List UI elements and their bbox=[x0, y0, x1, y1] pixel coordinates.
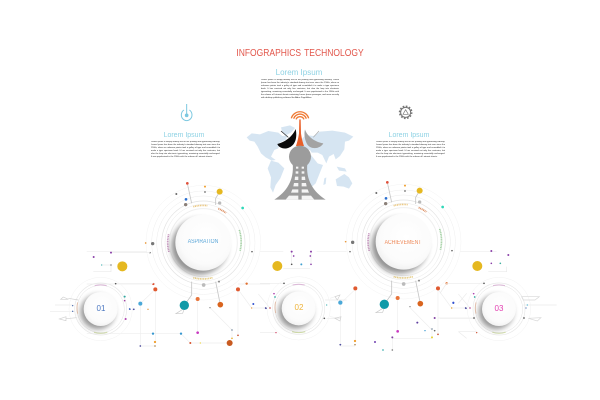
panel: step 03 circle bbox=[440, 250, 557, 341]
panel: achievement large circle bbox=[317, 181, 497, 351]
label: 01: 01 bbox=[97, 304, 105, 313]
network nodes bbox=[72, 252, 134, 320]
text block: top: Lorem Ipsum is simply dummy text of the printing and typesetting industry. Lorem Ipsum has been the industry's standard dummy text ever since the 1500s, when an unknown printer took a galley of type and scrambled it to make a type specimen book. It has survived not only five centuries, but also the leap into electronic typesetting, remaining essentially unchanged. It was popularised in the 1960s with the release of Letraset sheets containing Lorem Ipsum passages, and more recently with desktop publishing software like Aldus PageMaker. bbox=[261, 79, 339, 99]
label: achievement: ACHIEVEMENT bbox=[385, 240, 421, 246]
icon: power bbox=[181, 104, 192, 121]
heading: right lorem ipsum: Lorem Ipsum bbox=[389, 132, 429, 139]
satellite dish grey bbox=[304, 129, 323, 148]
icon: gear bbox=[400, 106, 412, 118]
label: 03: 03 bbox=[495, 304, 503, 313]
heading: left lorem ipsum: Lorem Ipsum bbox=[164, 132, 204, 139]
title: INFOGRAPHICS TECHNOLOGY bbox=[236, 48, 364, 59]
antenna signal arcs bbox=[291, 112, 309, 119]
text block: right: Lorem Ipsum is simply dummy text of the printing and typesetting industry. Lorem Ipsum has been the industry's standard dummy text ever since the 1500s, when an unknown printer took a galley of type and scrambled it to make a type specimen book. It has survived not only five centuries, but also the leap into electronic typesetting, remaining essentially unchanged. It was popularised in the 1960s with the release of Letraset sheets. bbox=[376, 141, 445, 158]
label: 02: 02 bbox=[295, 303, 303, 312]
panel: aspiration large circle bbox=[87, 182, 283, 347]
network nodes bbox=[451, 250, 528, 333]
heading: top lorem ipsum: Lorem Ipsum bbox=[276, 68, 322, 77]
panel: step 01 circle bbox=[50, 252, 153, 341]
satellite dish black bbox=[277, 129, 296, 148]
communication tower bbox=[274, 112, 326, 200]
network nodes bbox=[338, 181, 466, 351]
text block: left: Lorem Ipsum is simply dummy text of the printing and typesetting industry. Lorem Ipsum has been the industry's standard dummy text ever since the 1500s, when an unknown printer took a galley of type and scrambled it to make a type specimen book. It has survived not only five centuries, but also the leap into electronic typesetting, remaining essentially unchanged. It was popularised in the 1960s with the release of Letraset sheets. bbox=[151, 141, 220, 158]
network nodes bbox=[265, 251, 342, 345]
world map bbox=[247, 125, 353, 193]
panel: step 02 circle bbox=[260, 251, 347, 345]
network nodes bbox=[129, 182, 266, 347]
label: aspiration: ASPIRATION bbox=[188, 239, 218, 245]
